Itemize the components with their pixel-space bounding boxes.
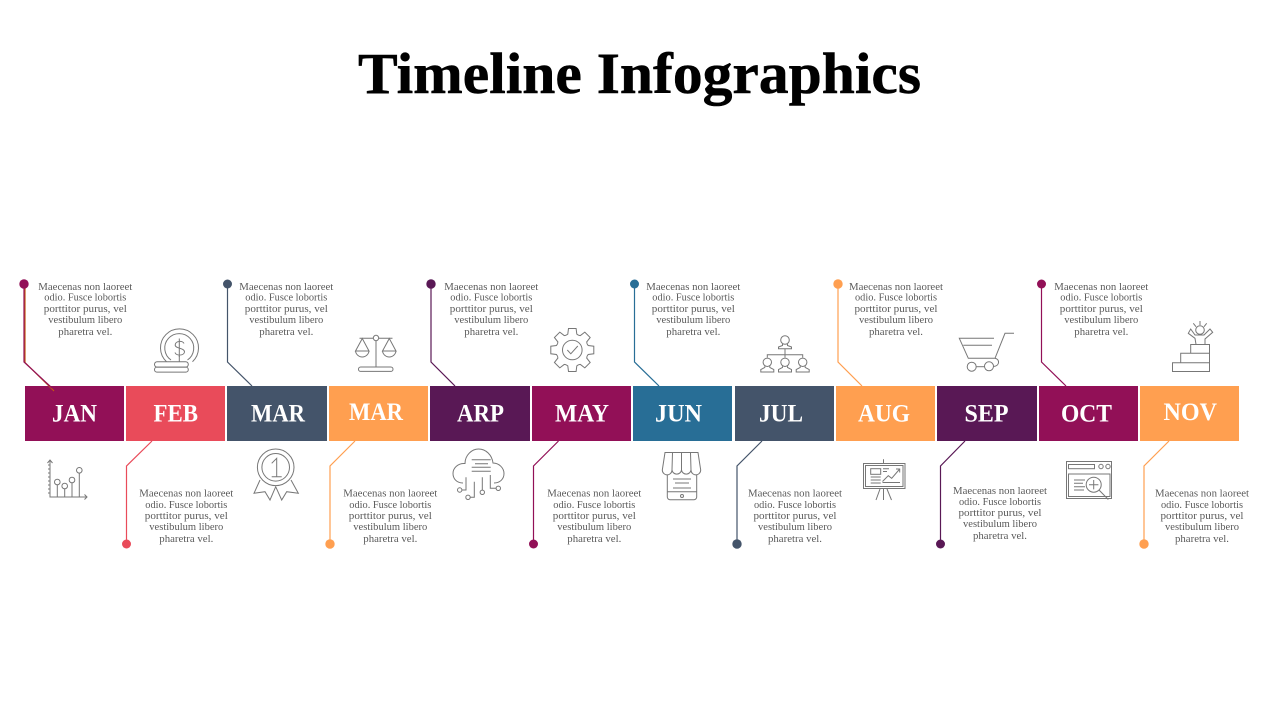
text block: MAR: porttitor purus, vel xyxy=(245,304,328,315)
month bar: MAR: MAR xyxy=(349,399,404,426)
month bar: MAY: MAY xyxy=(555,400,609,428)
connector: JUN xyxy=(630,280,659,386)
text block: MAY xyxy=(547,489,641,545)
month bar: ARP: ARP xyxy=(457,400,504,428)
panel: MAR (second) xyxy=(325,335,437,549)
text block: MAR: porttitor purus, vel xyxy=(349,511,432,522)
text block: MAR: Maecenas non laoreet xyxy=(343,489,437,500)
connector: JUL xyxy=(732,441,762,549)
text block: MAR: vestibulum libero xyxy=(353,522,427,533)
text block: JAN: vestibulum libero xyxy=(48,315,122,326)
text block: JAN: odio. Fusce lobortis xyxy=(44,293,126,304)
month bar: ARP xyxy=(430,386,530,441)
month bar: FEB xyxy=(126,386,225,441)
month bar: FEB: FEB xyxy=(154,400,198,428)
month bar: MAR xyxy=(227,386,327,441)
connector: FEB xyxy=(122,441,152,548)
text block: JUN: vestibulum libero xyxy=(656,315,730,326)
text block: JUN: Maecenas non laoreet xyxy=(646,282,740,293)
text block: MAY: vestibulum libero xyxy=(557,522,631,533)
text block: ARP: porttitor purus, vel xyxy=(450,304,533,315)
text block: FEB: porttitor purus, vel xyxy=(145,511,228,522)
text block: MAY: porttitor purus, vel xyxy=(553,511,636,522)
month bar: OCT: OCT xyxy=(1061,400,1112,428)
text block: JAN: pharetra vel. xyxy=(58,327,112,338)
icon: balance scale xyxy=(356,335,396,371)
month bar: NOV: NOV xyxy=(1164,399,1217,426)
month bar: MAY xyxy=(532,386,631,441)
text block: JUN: porttitor purus, vel xyxy=(652,304,735,315)
text block: FEB: vestibulum libero xyxy=(149,522,223,533)
month bar: JUL xyxy=(735,386,834,441)
icon: organisation chart xyxy=(761,336,809,372)
text block: JUL: porttitor purus, vel xyxy=(754,511,837,522)
text block: OCT: vestibulum libero xyxy=(1064,315,1138,326)
text block: SEP xyxy=(953,486,1047,542)
text block: JUL: odio. Fusce lobortis xyxy=(754,500,836,511)
text block: AUG: vestibulum libero xyxy=(859,315,933,326)
panel: MAY xyxy=(529,328,641,548)
text block: JUN: pharetra vel. xyxy=(666,327,720,338)
panel: JUN xyxy=(630,280,740,500)
text block: MAY: Maecenas non laoreet xyxy=(547,489,641,500)
title: Timeline Infographics xyxy=(358,41,921,106)
text block: OCT: porttitor purus, vel xyxy=(1060,304,1143,315)
connector: MAY xyxy=(529,441,558,548)
text block: AUG: Maecenas non laoreet xyxy=(849,282,943,293)
panel: ARP xyxy=(426,279,538,499)
month bar: JAN: JAN xyxy=(52,400,97,428)
text block: MAY: odio. Fusce lobortis xyxy=(553,500,635,511)
text block: NOV: Maecenas non laoreet xyxy=(1155,489,1249,500)
text block: JUL xyxy=(748,489,842,545)
text block: ARP: pharetra vel. xyxy=(464,327,518,338)
text block: OCT: Maecenas non laoreet xyxy=(1054,282,1148,293)
text block: SEP: pharetra vel. xyxy=(973,531,1027,542)
icon: medal xyxy=(254,449,298,500)
text block: ARP: vestibulum libero xyxy=(454,315,528,326)
connector: NOV xyxy=(1139,441,1169,549)
text block: NOV: pharetra vel. xyxy=(1175,534,1229,545)
icon: shopping cart xyxy=(959,333,1014,371)
month bar: AUG: AUG xyxy=(858,400,910,428)
text block: SEP: vestibulum libero xyxy=(963,519,1037,530)
icon: person on stairs xyxy=(1172,321,1213,372)
text block: MAR: pharetra vel. xyxy=(363,534,417,545)
panel: JUL xyxy=(732,336,842,549)
connector: MAR xyxy=(223,280,252,386)
text block: MAR: vestibulum libero xyxy=(249,315,323,326)
month bar: MAR: MAR xyxy=(251,400,306,428)
panel: OCT xyxy=(1037,280,1148,500)
month bar: JUN: JUN xyxy=(655,400,702,428)
text block: ARP xyxy=(444,282,538,338)
text block: JUN xyxy=(646,282,740,338)
text block: OCT xyxy=(1054,282,1148,338)
month bar: NOV xyxy=(1140,386,1239,441)
text block: MAR: odio. Fusce lobortis xyxy=(349,500,431,511)
connector: ARP xyxy=(426,279,455,386)
text block: FEB xyxy=(139,489,233,545)
connector: JAN xyxy=(19,279,54,391)
month bar: SEP: SEP xyxy=(964,400,1008,428)
text block: SEP: odio. Fusce lobortis xyxy=(959,497,1041,508)
text block: MAR: pharetra vel. xyxy=(259,327,313,338)
connector: AUG xyxy=(833,279,862,386)
text block: AUG: odio. Fusce lobortis xyxy=(855,293,937,304)
text block: AUG: pharetra vel. xyxy=(869,327,923,338)
icon: mobile store xyxy=(662,452,701,500)
text block: NOV: porttitor purus, vel xyxy=(1160,511,1244,522)
text block: NOV xyxy=(1155,489,1249,545)
text block: FEB: Maecenas non laoreet xyxy=(139,489,233,500)
connector: SEP xyxy=(936,441,965,548)
icon: bar chart with dots xyxy=(48,460,87,500)
month bar: JUL: JUL xyxy=(759,400,803,428)
text block: JUL: pharetra vel. xyxy=(768,534,822,545)
text block: MAR: Maecenas non laoreet xyxy=(239,282,333,293)
month bar: SEP xyxy=(937,386,1037,441)
icon: coin stack xyxy=(154,329,198,372)
text block: JUL: Maecenas non laoreet xyxy=(748,489,842,500)
icon: cloud network xyxy=(453,449,504,499)
text block: MAR xyxy=(239,282,333,338)
text block: MAR: odio. Fusce lobortis xyxy=(245,293,327,304)
month bar: JAN xyxy=(25,386,124,441)
connector: MAR xyxy=(325,441,355,549)
panel: FEB xyxy=(122,329,233,548)
text block: JAN: porttitor purus, vel xyxy=(44,304,127,315)
connector: OCT xyxy=(1037,280,1066,386)
panel: JAN xyxy=(19,279,132,500)
icon: browser search xyxy=(1066,462,1112,500)
icon: presentation board xyxy=(864,459,905,500)
text block: JAN xyxy=(38,282,132,338)
text block: AUG xyxy=(849,282,943,338)
text block: AUG: porttitor purus, vel xyxy=(854,304,938,315)
text block: ARP: odio. Fusce lobortis xyxy=(450,293,532,304)
text block: JAN: Maecenas non laoreet xyxy=(38,282,132,293)
text block: JUL: vestibulum libero xyxy=(758,522,832,533)
text block: OCT: pharetra vel. xyxy=(1074,327,1128,338)
panel: NOV xyxy=(1139,321,1249,549)
panel: AUG xyxy=(833,279,943,500)
text block: SEP: Maecenas non laoreet xyxy=(953,486,1047,497)
text block: ARP: Maecenas non laoreet xyxy=(444,282,538,293)
text block: FEB: odio. Fusce lobortis xyxy=(145,500,227,511)
text block: NOV: vestibulum libero xyxy=(1165,522,1239,533)
text block: JUN: odio. Fusce lobortis xyxy=(652,293,734,304)
text block: FEB: pharetra vel. xyxy=(159,534,213,545)
text block: NOV: odio. Fusce lobortis xyxy=(1161,500,1243,511)
text block: MAY: pharetra vel. xyxy=(567,534,621,545)
month bar: MAR xyxy=(329,386,428,441)
text block: MAR xyxy=(343,489,437,545)
text block: SEP: porttitor purus, vel xyxy=(958,508,1042,519)
panel: MAR xyxy=(223,280,333,500)
panel: SEP xyxy=(936,333,1047,548)
text block: OCT: odio. Fusce lobortis xyxy=(1060,293,1142,304)
month bar: OCT xyxy=(1039,386,1138,441)
month bar: AUG xyxy=(836,386,935,441)
icon: gear with check xyxy=(551,328,594,372)
month bar: JUN xyxy=(633,386,732,441)
